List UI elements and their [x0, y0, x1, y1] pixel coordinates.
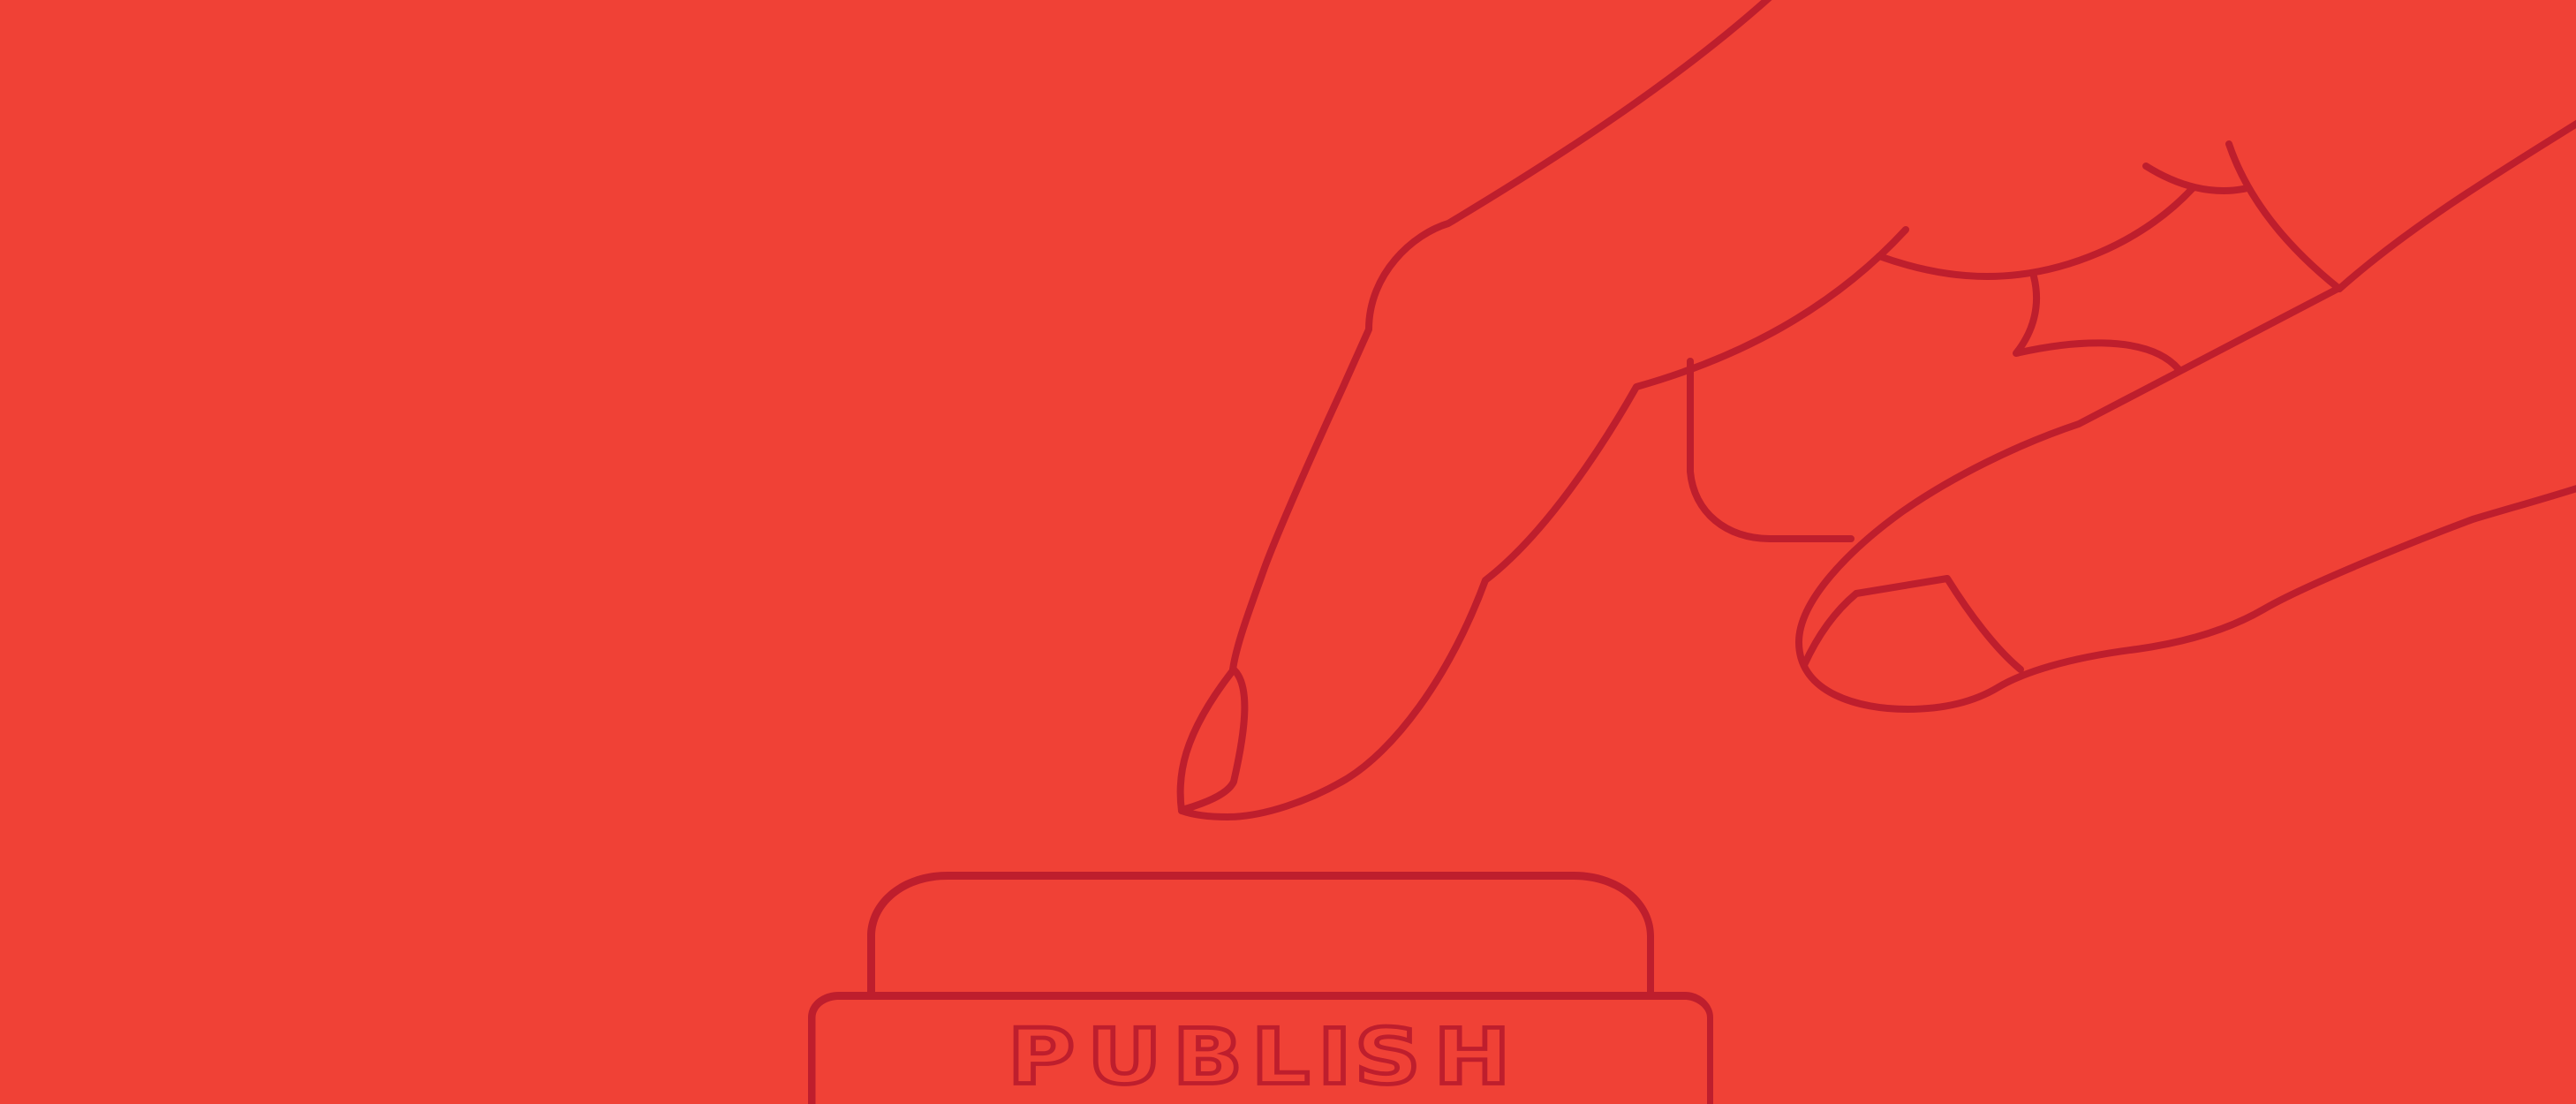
button label: PUBLISH [1008, 1012, 1510, 1101]
button cap [867, 872, 1654, 994]
hand line art [1181, 0, 2576, 817]
button base [808, 992, 1713, 1104]
fingernail: index finger [1181, 669, 1244, 811]
publish button [808, 872, 1713, 1104]
knuckle creases [1879, 144, 2339, 369]
index finger [1182, 0, 1906, 817]
curled finger outline [1690, 361, 1851, 539]
thumbnail [1804, 578, 2021, 669]
back of hand [2339, 122, 2576, 289]
thumb [1799, 288, 2576, 709]
